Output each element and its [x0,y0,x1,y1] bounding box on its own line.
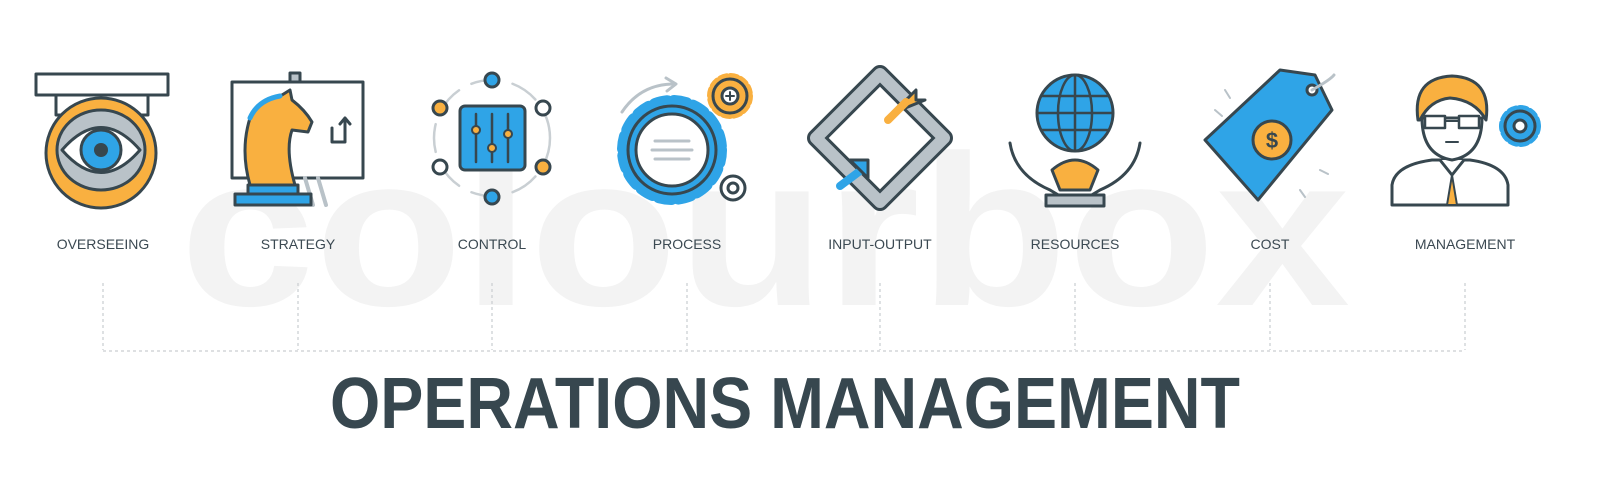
icon: cost price tag [1205,70,1334,200]
icon: control sliders [433,73,550,204]
watermark: colourbox [180,110,1350,351]
icon: input-output diamond [816,74,944,202]
labels [57,236,1516,252]
icon: strategy knight board [232,73,363,205]
icon: resources globe hands [1010,75,1140,206]
icon: management person gear [1392,76,1537,205]
labels: RESOURCES [1031,236,1119,252]
labels: OVERSEEING [57,236,149,252]
icon: cost price tag: $ [1266,128,1278,153]
icon: process gears [622,77,749,200]
title: OPERATIONS MANAGEMENT [330,364,1240,444]
labels: CONTROL [458,236,526,252]
labels: MANAGEMENT [1415,236,1516,252]
labels: STRATEGY [261,236,336,252]
labels: PROCESS [653,236,721,252]
icon: overseeing camera eye [36,74,168,208]
labels: COST [1251,236,1290,252]
labels: INPUT-OUTPUT [828,236,932,252]
